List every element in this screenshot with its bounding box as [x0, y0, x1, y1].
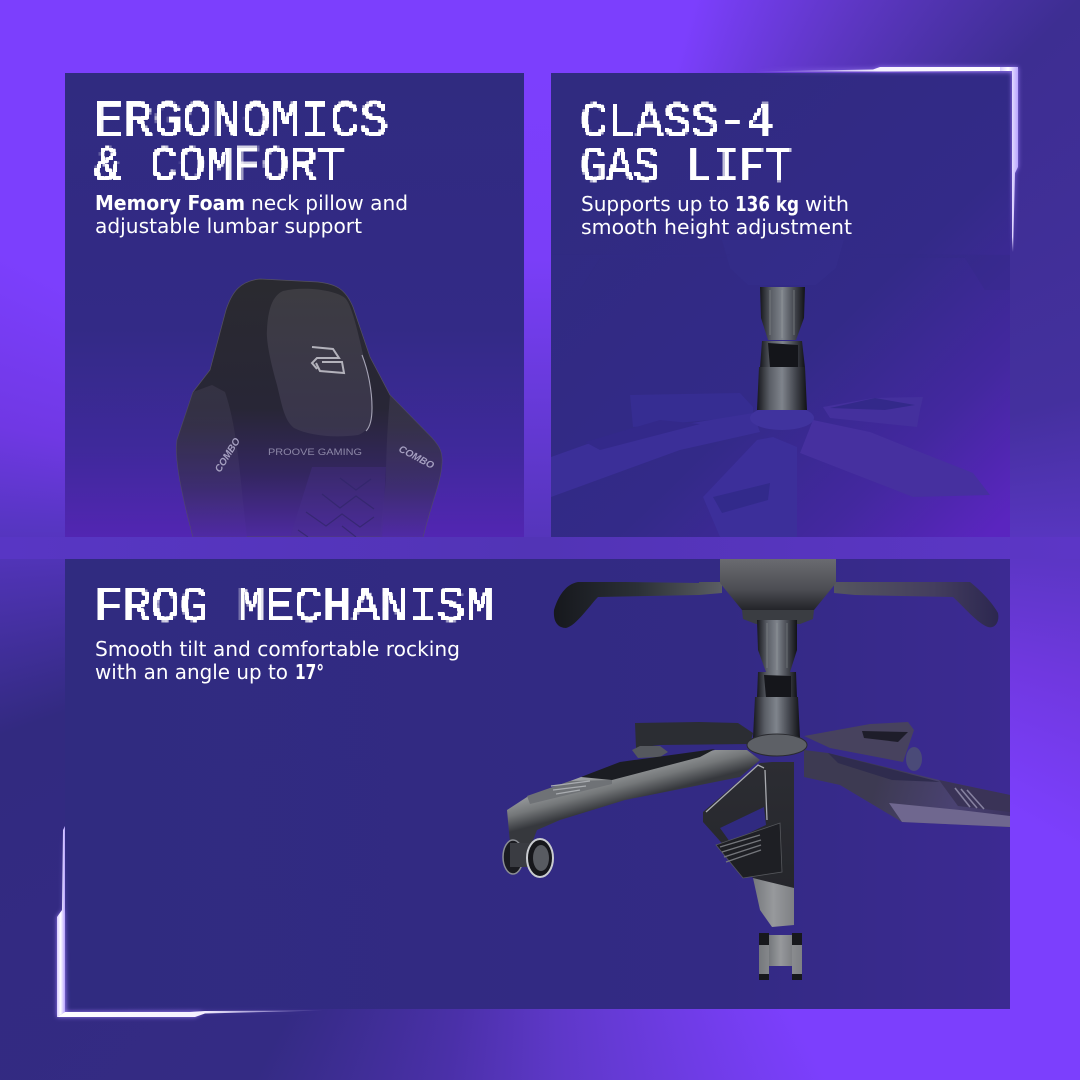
chair base illustration: [503, 559, 1010, 980]
panel background: [65, 73, 524, 537]
heading: ergonomics and comfort: ERGONOMICS: [94, 94, 389, 151]
heading: class-4 gas lift: GAS LIFT: [580, 140, 792, 197]
panel: frog mechanism: [65, 559, 1010, 1009]
left lever: [554, 582, 722, 628]
heading: class-4 gas lift: [580, 95, 792, 197]
panel background: [65, 559, 1010, 1009]
rear right base arm: [804, 722, 914, 762]
description text: Supports up to: [581, 192, 729, 216]
backrest outline: [176, 279, 442, 537]
right lever: [834, 582, 998, 627]
description text: 17°: [295, 660, 324, 684]
gutter shading above bottom panel: [0, 537, 1080, 559]
pillow edge highlight: [362, 355, 372, 431]
front leg bracket highlight: [706, 765, 767, 820]
brand text on backrest: PROOVE GAMING: [268, 447, 362, 458]
logo on pillow: [312, 347, 344, 373]
base arm wells: [585, 398, 915, 513]
glow frame: top right corner: [753, 67, 1018, 252]
description text: neck pillow and: [251, 191, 408, 215]
gas lift sleeve: [753, 697, 800, 738]
front base leg: [703, 762, 794, 890]
description text: Smooth tilt and comfortable rocking: [95, 637, 460, 661]
gas lift sleeve: [757, 367, 807, 410]
right arm side face: [889, 803, 1010, 827]
front leg window: [720, 807, 766, 842]
front leg ribbed plate: [716, 823, 782, 878]
faded chair base illustration: [551, 287, 990, 526]
description text: with an angle up to: [95, 660, 288, 684]
description text: 136 kg: [735, 192, 799, 216]
left arm plate with ribs: [527, 780, 612, 804]
rear left base arm: [635, 722, 753, 748]
glow frame: bottom left corner: [57, 826, 323, 1017]
description text: [581, 192, 852, 239]
right arm plate: [939, 780, 1010, 812]
mechanism silhouette: [722, 240, 844, 285]
panel background: [551, 73, 1010, 537]
left wing: [176, 385, 247, 537]
seat quilting: [290, 467, 386, 537]
left wing label: COMBO: [213, 436, 243, 475]
neck pillow: [267, 289, 373, 436]
gas lift upper cylinder: [757, 620, 797, 672]
base arms silhouette: [551, 393, 990, 537]
gas lift upper cylinder: [760, 287, 805, 340]
left caster: [503, 839, 553, 877]
front left base arm: [507, 750, 760, 843]
heading: ergonomics and comfort: [94, 94, 389, 196]
left arm well: [581, 749, 715, 780]
mechanism collar: [742, 610, 814, 624]
rear right well: [862, 731, 908, 742]
panel: ergonomics and comfort: [65, 73, 524, 537]
heading: ergonomics and comfort: & COMFORT: [94, 139, 345, 196]
description text: adjustable lumbar support: [95, 214, 362, 238]
description text: with: [805, 192, 849, 216]
description text: smooth height adjustment: [581, 215, 852, 239]
rear right caster: [906, 747, 922, 771]
right wing: [380, 395, 442, 537]
lever silhouettes: [551, 254, 1010, 290]
description text: Memory Foam: [95, 191, 245, 215]
rear left caster: [632, 746, 668, 758]
gas lift middle: [757, 672, 797, 698]
heading: frog mechanism: FROG MECHANISM: [94, 580, 494, 637]
description text: [95, 191, 408, 238]
right base arm: [804, 750, 1010, 827]
heading: class-4 gas lift: CLASS-4: [580, 95, 774, 152]
panel: class-4 gas lift: [551, 73, 1010, 537]
right arm top well: [828, 753, 940, 782]
gas lift middle: [760, 341, 805, 368]
gutter shading between top panels: [524, 73, 551, 537]
front leg lower silver section: [753, 878, 794, 927]
mechanism box: [720, 559, 836, 610]
front caster: [759, 933, 802, 980]
description text: [95, 637, 460, 684]
base hub: [747, 734, 807, 756]
right wing label: COMBO: [397, 444, 436, 472]
chair backrest illustration: [176, 279, 442, 537]
